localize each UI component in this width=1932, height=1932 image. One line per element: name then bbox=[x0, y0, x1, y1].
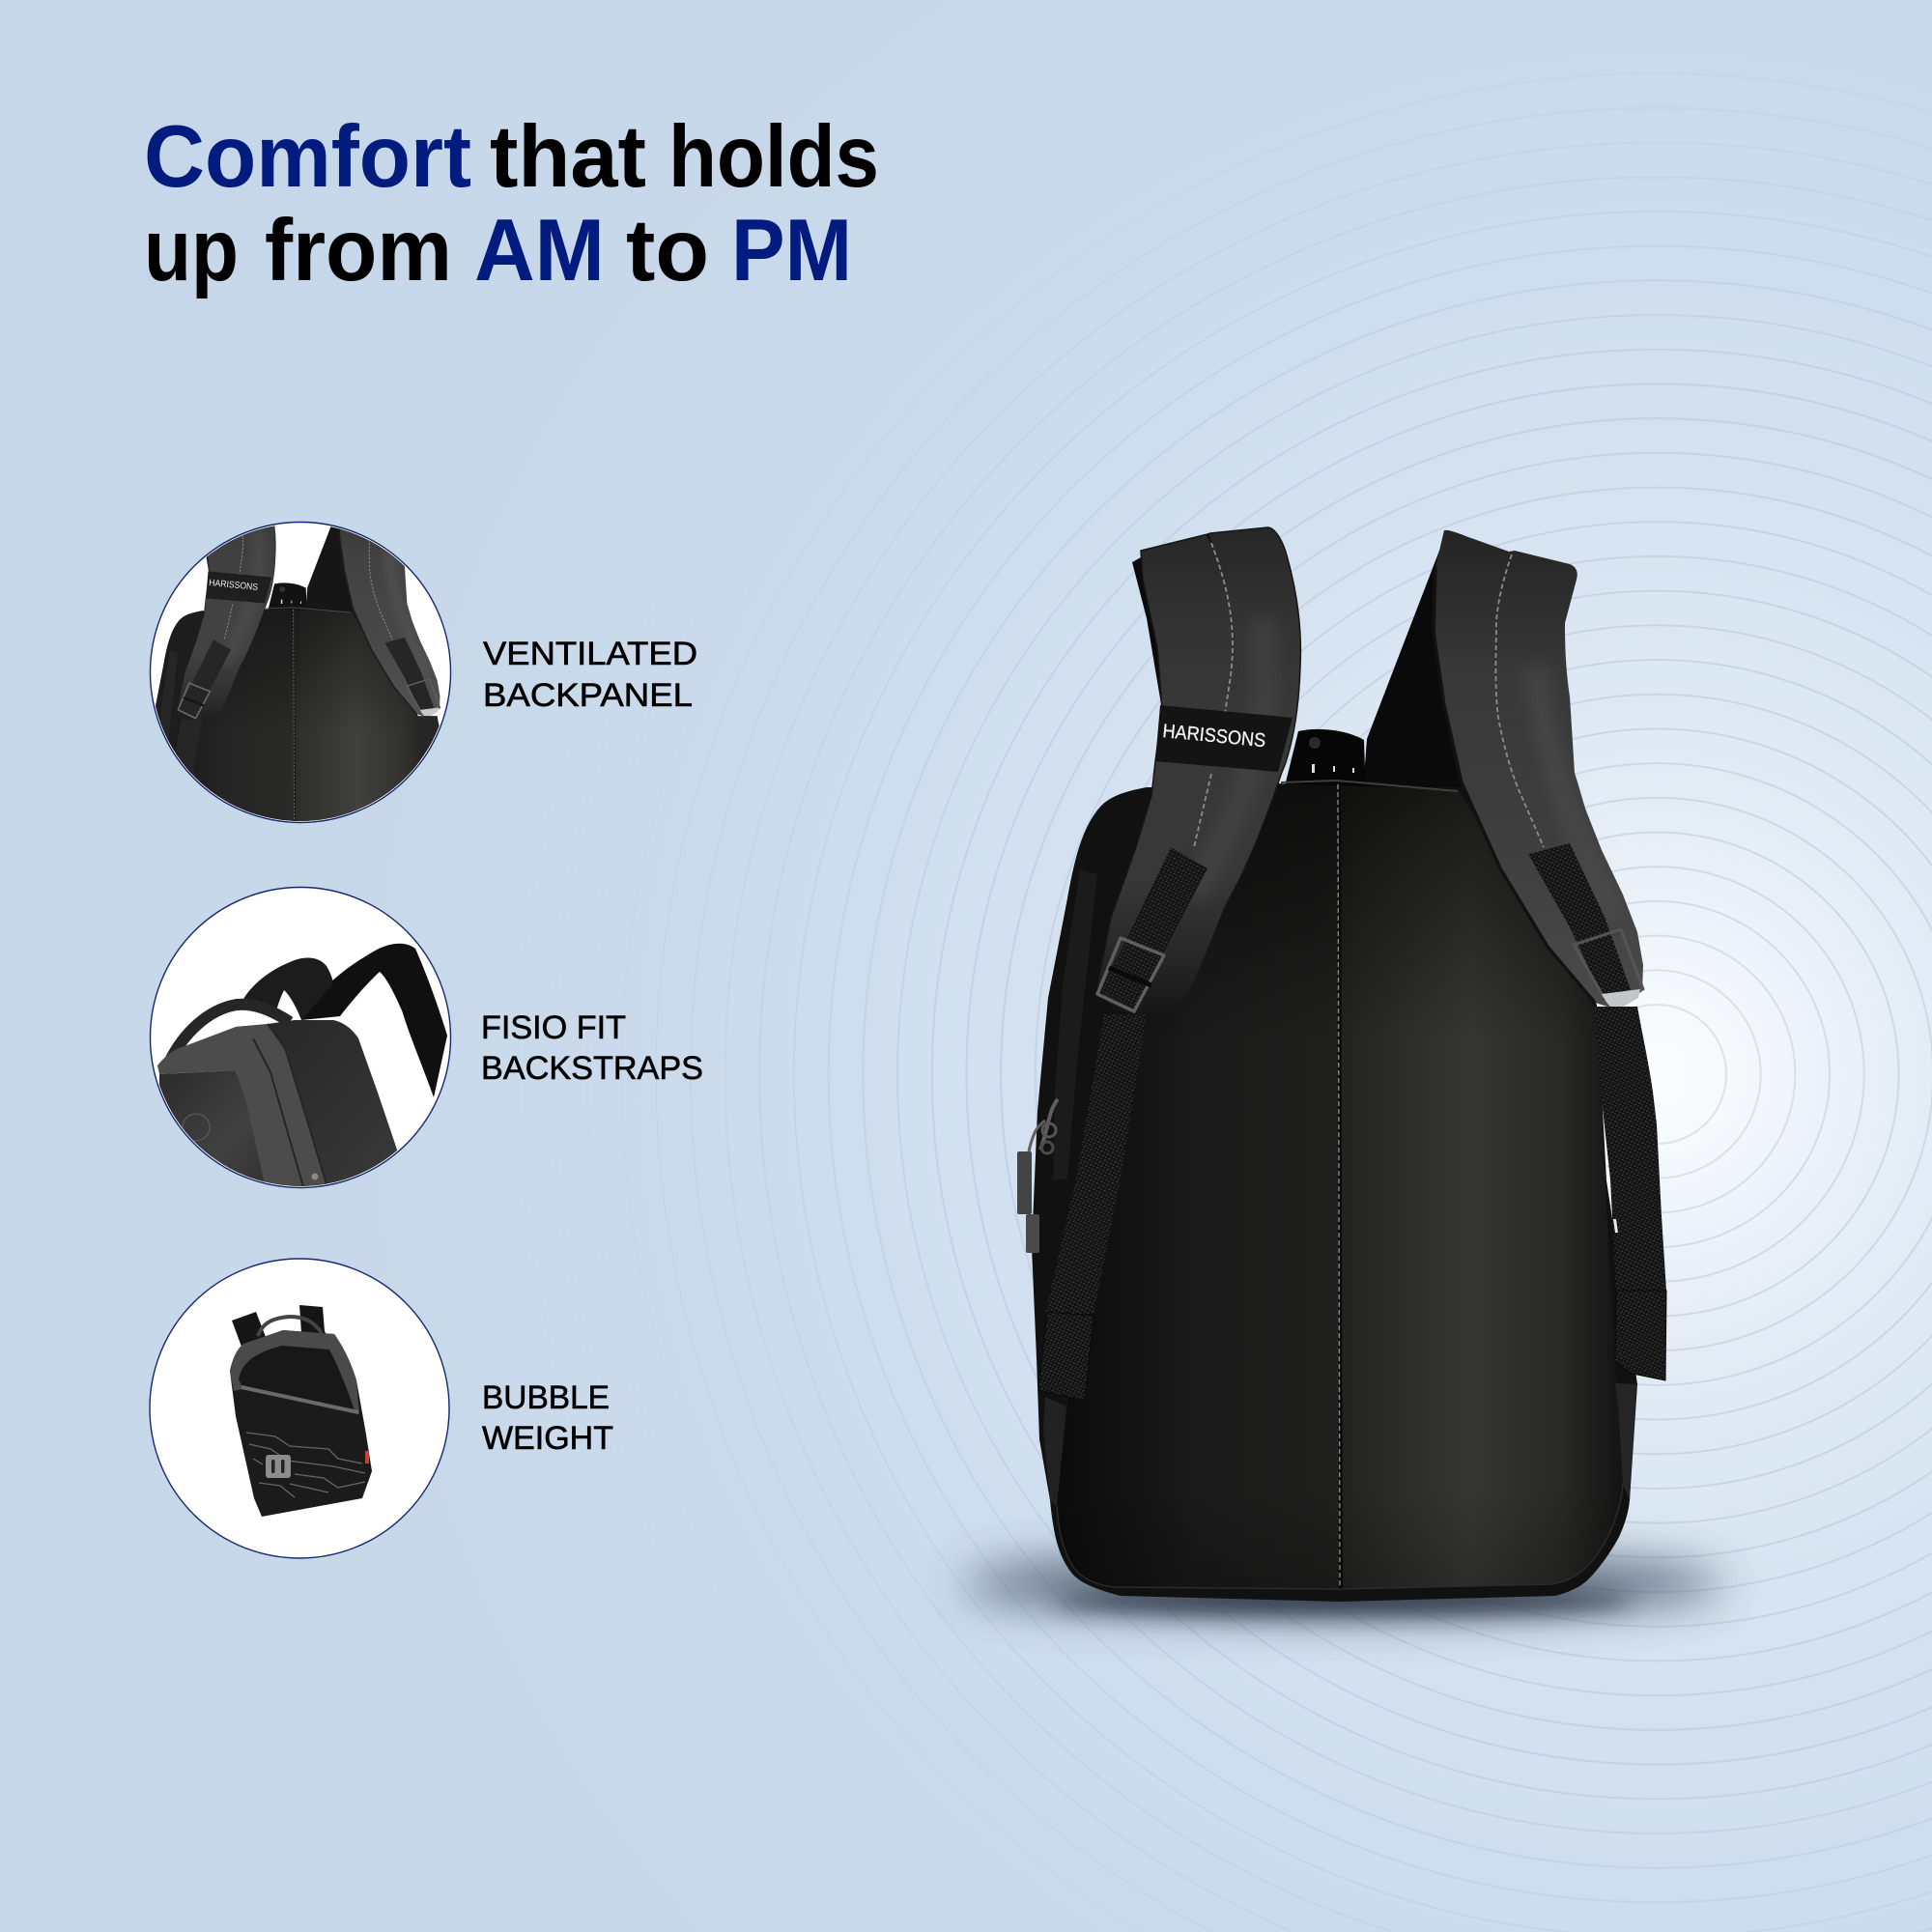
pocket zip strip bbox=[242, 1387, 358, 1412]
right lower webbing bbox=[1594, 1007, 1666, 1291]
usb plate bbox=[266, 1455, 291, 1478]
front face bbox=[159, 1070, 265, 1182]
title: that bbox=[490, 108, 646, 206]
red tab bbox=[365, 1451, 369, 1463]
title: Comfort bbox=[144, 108, 471, 206]
body silhouette bbox=[1032, 787, 1637, 1602]
grey rim bbox=[230, 1330, 359, 1414]
title: from bbox=[265, 202, 452, 299]
title: AM bbox=[474, 202, 605, 299]
close-up brand text: HARISSONS bbox=[209, 578, 259, 593]
rivet bbox=[311, 1173, 319, 1180]
right upper webbing bbox=[1528, 843, 1633, 1000]
label: ventilated backpanel bbox=[483, 636, 697, 714]
bottom rim bbox=[1057, 1484, 1623, 1589]
centre seam bbox=[1338, 784, 1341, 1589]
label: fisio fit backstraps: BACKSTRAPS bbox=[481, 1050, 703, 1087]
top panel bbox=[239, 1346, 355, 1410]
mesh behind right strap bbox=[1362, 551, 1468, 802]
panel: ventilated backpanel circle bbox=[149, 522, 452, 823]
faint emblem bbox=[183, 1114, 210, 1141]
label: bubble weight: BUBBLE bbox=[482, 1379, 610, 1416]
label: ventilated backpanel: VENTILATED bbox=[483, 636, 697, 672]
ground shadow under backpack bbox=[961, 1553, 1724, 1615]
handle bbox=[258, 1317, 322, 1336]
backpack body side bbox=[236, 1020, 398, 1198]
label: fisio fit backstraps bbox=[481, 1009, 703, 1087]
title: holds bbox=[668, 108, 879, 206]
zipper pulls bbox=[1017, 1099, 1058, 1253]
title bbox=[144, 108, 879, 299]
title: up bbox=[144, 202, 239, 299]
left strap brand tab bbox=[1155, 705, 1293, 772]
brand tab text: HARISSONS bbox=[1162, 721, 1266, 752]
top handle bbox=[170, 1005, 290, 1061]
backpack close-up bbox=[156, 526, 440, 821]
buckle silver tip bbox=[1602, 989, 1640, 1010]
back panel bbox=[1057, 781, 1623, 1589]
right buckle bbox=[1574, 929, 1643, 997]
straps bbox=[232, 1305, 328, 1347]
label: bubble weight bbox=[482, 1379, 613, 1457]
middle strap bbox=[242, 957, 333, 1020]
left strap lining bbox=[1132, 553, 1174, 798]
label: fisio fit backstraps: FISIO FIT bbox=[481, 1009, 626, 1046]
left upper webbing bbox=[1101, 847, 1208, 1009]
textured grey band bbox=[157, 1024, 327, 1198]
panel: fisio fit backstraps circle bbox=[151, 887, 450, 1198]
main backpack bbox=[1017, 527, 1666, 1602]
right webbing tab bbox=[1615, 1291, 1666, 1380]
right strap bbox=[1434, 530, 1643, 1009]
far strap bbox=[301, 944, 447, 1097]
label: ventilated backpanel: BACKPANEL bbox=[483, 677, 693, 714]
neck gap bbox=[1281, 729, 1366, 802]
bottom-side flaps bbox=[1615, 1383, 1636, 1500]
left lower webbing bbox=[1045, 1014, 1147, 1314]
title: PM bbox=[731, 202, 852, 299]
left webbing tab bbox=[1038, 1312, 1094, 1401]
title: to bbox=[626, 202, 709, 299]
left buckle bbox=[1097, 938, 1164, 1011]
gap highlight bbox=[1613, 1219, 1618, 1233]
circuit lines bbox=[246, 1433, 365, 1497]
panel: bubble weight circle bbox=[150, 1259, 449, 1558]
label: bubble weight: WEIGHT bbox=[482, 1420, 613, 1457]
small backpack body bbox=[230, 1330, 372, 1517]
left strap bbox=[1097, 527, 1300, 1022]
side gusset bbox=[1053, 869, 1097, 1180]
